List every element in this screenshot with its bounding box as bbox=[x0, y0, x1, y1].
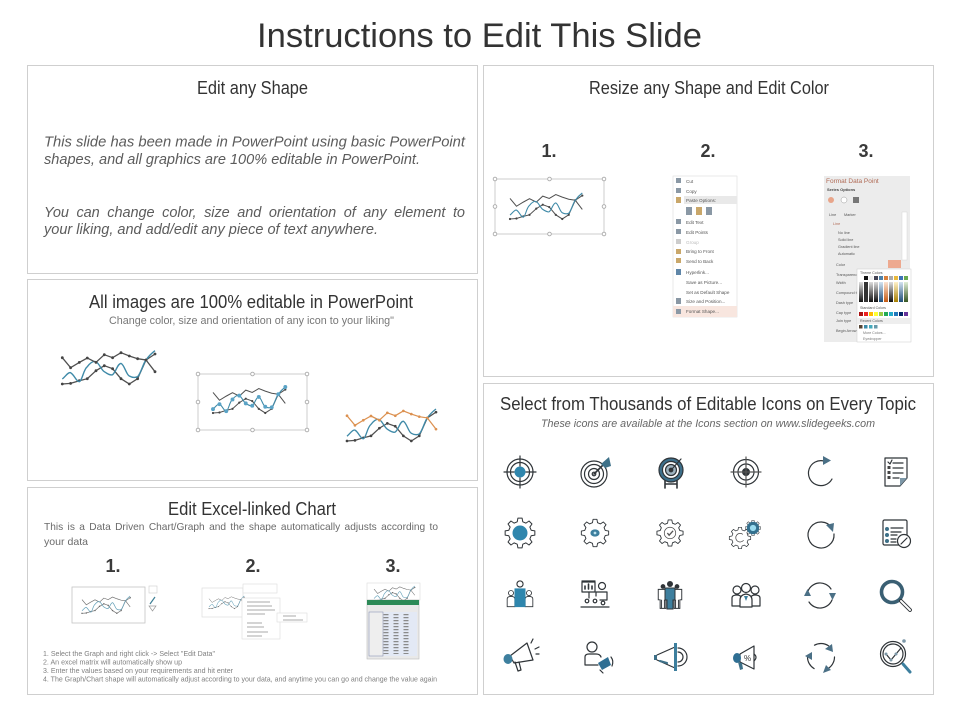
screenshot: right-click menu: Edit Text bbox=[686, 220, 704, 225]
icon: bullseye reticle bbox=[731, 457, 761, 487]
screenshot: format data point pane: Recent Colors bbox=[860, 319, 883, 323]
icon: two arrows cycle bbox=[804, 583, 836, 608]
screenshot: format data point pane: Cap type bbox=[836, 311, 851, 315]
heading: edit any shape: Edit any Shape bbox=[197, 78, 308, 98]
screenshot: format data point pane: Transparency bbox=[836, 273, 859, 277]
icon: magnifier with graph bbox=[880, 639, 910, 672]
screenshot: right-click menu bbox=[673, 176, 737, 317]
screenshot: format data point pane: Solid line bbox=[838, 238, 853, 242]
icon: megaphone side view bbox=[654, 643, 687, 671]
icon: crosshair target bbox=[504, 456, 536, 488]
screenshot: right-click menu: Copy bbox=[686, 189, 697, 194]
icon: rotate arrow bbox=[808, 456, 832, 486]
panel: all images editable bbox=[28, 280, 478, 480]
screenshot: format data point pane bbox=[824, 176, 911, 342]
screenshot: format data point pane: Automatic bbox=[838, 252, 855, 256]
screenshot: format data point pane: Series Options bbox=[827, 187, 856, 192]
screenshot: right-click menu: Edit Points bbox=[686, 230, 709, 235]
icon: team leader bbox=[507, 581, 533, 607]
screenshot: format data point pane: Standard Colors bbox=[860, 306, 886, 310]
screenshot: right-click menu: Format Shape... bbox=[686, 309, 719, 314]
text block: steps: 2. An excel matrix will automatically show up bbox=[43, 658, 182, 666]
heading: resize any shape: Resize any Shape and Edit Color bbox=[589, 78, 829, 98]
icon: gear with eye bbox=[581, 519, 609, 547]
icon: magnifying glass bbox=[882, 582, 910, 610]
screenshot: format data point pane: Join type bbox=[836, 319, 851, 323]
panel: icons bbox=[484, 384, 934, 694]
screenshot: format data point pane: Compound type bbox=[836, 291, 863, 295]
thumbnail: context menu on chart bbox=[202, 584, 307, 639]
screenshot: format data point pane: Begin Arrow type bbox=[836, 329, 865, 333]
screenshot: right-click menu: Save as Picture... bbox=[686, 280, 722, 285]
screenshot: format data point pane: Theme Colors bbox=[860, 271, 883, 275]
text block: powerpoint intro: your liking, and add/edit any piece of text anywhere. bbox=[43, 222, 378, 238]
icon: three arrows cycle bbox=[805, 644, 834, 673]
title: Instructions to Edit This Slide bbox=[257, 17, 702, 55]
screenshot: right-click menu: Size and Position... bbox=[686, 299, 725, 304]
text block: powerpoint intro bbox=[43, 134, 466, 238]
text block: steps bbox=[43, 649, 437, 684]
screenshot: right-click menu: Set as Default Shape bbox=[686, 290, 730, 295]
subheading: icons section: These icons are available at the Icons section on www.slidegeeks.com bbox=[541, 418, 875, 430]
screenshot: right-click menu: Cut bbox=[686, 179, 694, 184]
text block: steps: 3. Enter the values based on your requirements and hit enter bbox=[43, 666, 233, 675]
text block: steps: 1. Select the Graph and right click -> Select "Edit Data" bbox=[43, 649, 215, 658]
icon: presenter with board bbox=[581, 581, 609, 607]
screenshot: format data point pane: More Colors... bbox=[863, 331, 886, 335]
step numbers: 2. bbox=[700, 141, 716, 161]
icon: checklist document bbox=[885, 458, 907, 486]
icon: two gears bbox=[729, 520, 761, 549]
icon: megaphone percent bbox=[733, 646, 756, 670]
step numbers: 2. bbox=[245, 556, 261, 576]
text block: steps: 4. The Graph/Chart shape will automatically adjust according to your data, and anytime you can go and change the value again bbox=[43, 674, 437, 684]
screenshot: right-click menu: Group bbox=[686, 240, 699, 245]
step numbers bbox=[105, 556, 401, 576]
step numbers: 1. bbox=[105, 556, 121, 576]
screenshot: right-click menu: Hyperlink... bbox=[686, 270, 709, 275]
screenshot: format data point pane: Gradient line bbox=[838, 245, 860, 249]
screenshot: format data point pane: No line bbox=[838, 231, 850, 235]
text block: data driven chart: This is a Data Driven Chart/Graph and the shape automatically adjusts according to bbox=[44, 521, 438, 533]
icon: business team bbox=[658, 581, 682, 609]
step numbers: 3. bbox=[385, 556, 401, 576]
thumbnail: excel data sheet bbox=[367, 583, 420, 659]
subheading: change color: Change color, size and orientation of any icon to your liking" bbox=[109, 315, 394, 327]
screenshot: format data point pane: Line bbox=[829, 213, 836, 217]
icon: target with arrow bbox=[581, 457, 611, 487]
panel: edit excel-linked chart bbox=[28, 488, 478, 694]
icon: megaphone with sound bbox=[504, 639, 539, 671]
chart: orange line chart bbox=[347, 409, 436, 441]
text block: powerpoint intro: You can change color, size and orientation of any element to bbox=[44, 205, 465, 221]
screenshot: format data point pane: Marker bbox=[844, 213, 857, 217]
icon: gear blue core bbox=[505, 518, 535, 548]
step numbers: 3. bbox=[858, 141, 874, 161]
screenshot: format data point pane: Dash type bbox=[836, 301, 853, 305]
screenshot: format data point pane: Format Data Point bbox=[826, 178, 879, 185]
panel: edit any shape bbox=[28, 66, 478, 274]
icon: support team bbox=[732, 584, 760, 607]
screenshot: format data point pane: Color bbox=[836, 263, 846, 267]
heading: select icons: Select from Thousands of Editable Icons on Every Topic bbox=[500, 394, 916, 414]
screenshot: format data point pane: Width bbox=[836, 281, 846, 285]
step numbers bbox=[541, 141, 874, 161]
chart: selected line chart with handles bbox=[196, 372, 309, 432]
icon: person with megaphone bbox=[585, 642, 613, 673]
panel: resize any shape bbox=[484, 66, 934, 376]
screenshot: format data point pane: Line bbox=[833, 222, 840, 226]
icon: refresh circle bbox=[808, 522, 834, 548]
screenshot: right-click menu: Send to Back bbox=[686, 259, 714, 264]
chart: resizable chart with handles bbox=[493, 177, 606, 236]
thumbnail: selected chart bbox=[72, 586, 157, 623]
icon: gear with check bbox=[657, 520, 683, 546]
text block: powerpoint intro: shapes, and all graphics are 100% editable in PowerPoint. bbox=[44, 152, 420, 168]
screenshot: format data point pane: Eyedropper bbox=[863, 337, 882, 341]
text block: data driven chart: your data bbox=[44, 536, 88, 548]
chart: plain line chart bbox=[62, 351, 155, 384]
heading: edit excel-linked chart: Edit Excel-linked Chart bbox=[168, 499, 336, 519]
heading: all images editable: All images are 100% editable in PowerPoint bbox=[89, 292, 413, 312]
text block: powerpoint intro: This slide has been made in PowerPoint using basic PowerPoint bbox=[44, 134, 466, 150]
step numbers: 1. bbox=[541, 141, 557, 161]
icon: target on stand bbox=[659, 458, 683, 488]
screenshot: right-click menu: Paste Options: bbox=[686, 198, 716, 203]
icon: megaphone percent: % bbox=[744, 654, 751, 663]
text block: data driven chart bbox=[44, 521, 438, 548]
screenshot: right-click menu: Bring to Front bbox=[686, 249, 715, 254]
icon: checklist window bbox=[883, 520, 910, 548]
